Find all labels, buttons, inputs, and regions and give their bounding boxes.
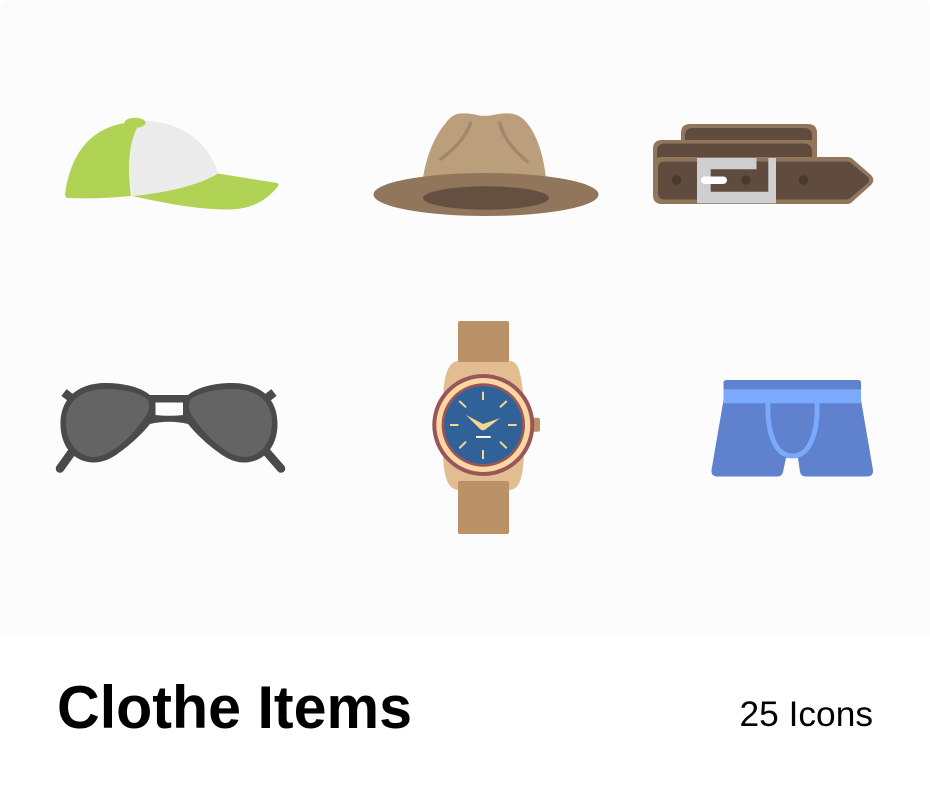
icon: wrist watch (432, 321, 540, 534)
temple arms (64, 392, 274, 400)
watch bezel (432, 374, 534, 476)
right lens (184, 383, 278, 463)
watch case (442, 361, 524, 490)
buckle pin (701, 176, 727, 184)
icon: baseball cap (65, 118, 279, 210)
icon: fedora hat (374, 113, 598, 216)
icon: boxer briefs (711, 380, 873, 476)
front pouch seam (768, 403, 817, 456)
shorts body (711, 400, 873, 476)
title: Clothe Items (57, 674, 412, 741)
left lens (60, 383, 154, 463)
icon: leather belt (653, 124, 873, 204)
bridge (150, 395, 188, 424)
hat brim (374, 173, 598, 216)
crown button (532, 418, 540, 432)
date mark (476, 436, 491, 438)
waistband top (724, 380, 861, 390)
main strap (653, 157, 873, 204)
icon count: 25 Icons (740, 695, 873, 734)
hour marks (450, 392, 517, 459)
brim shadow (423, 186, 549, 210)
waistband (724, 389, 861, 403)
hat crown (423, 113, 546, 178)
lower strap (458, 481, 509, 534)
crown creases (441, 123, 527, 162)
icon: aviator sunglasses (60, 383, 281, 468)
watch hands (466, 415, 500, 430)
upper strap (458, 321, 509, 362)
belt holes (672, 175, 681, 185)
watch dial (444, 386, 522, 464)
cap button (124, 118, 146, 128)
top strap (681, 124, 817, 160)
buckle (697, 158, 776, 203)
middle strap (653, 140, 816, 170)
